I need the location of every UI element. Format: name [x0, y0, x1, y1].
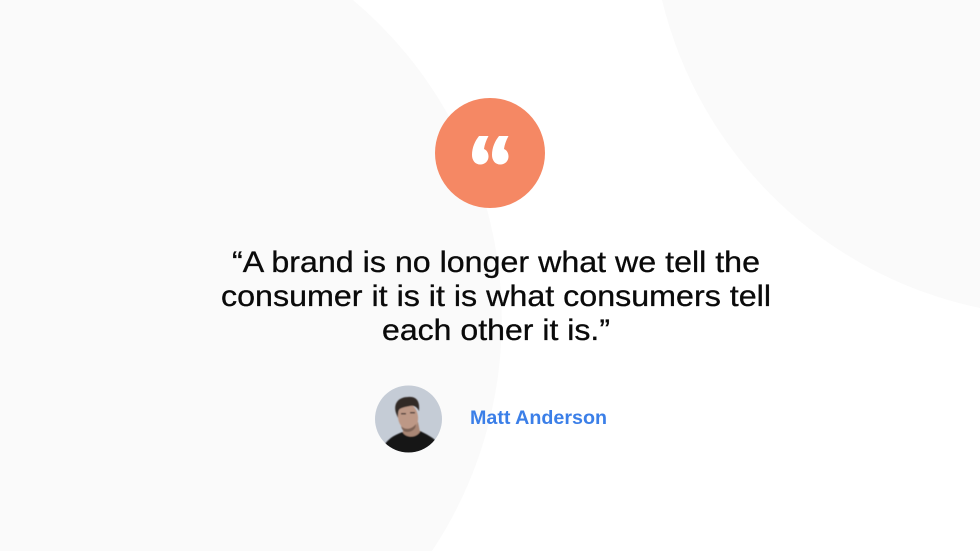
quote text: each other it is.” [382, 314, 610, 347]
quote text [221, 246, 771, 347]
quote text: “A brand is no longer what we tell the [232, 246, 760, 279]
icon: quotation mark badge [435, 98, 545, 208]
quote text: consumer it is it is what consumers tell [221, 280, 771, 313]
avatar: portrait of Matt Anderson [375, 385, 442, 453]
author name: Matt Anderson [470, 408, 607, 429]
